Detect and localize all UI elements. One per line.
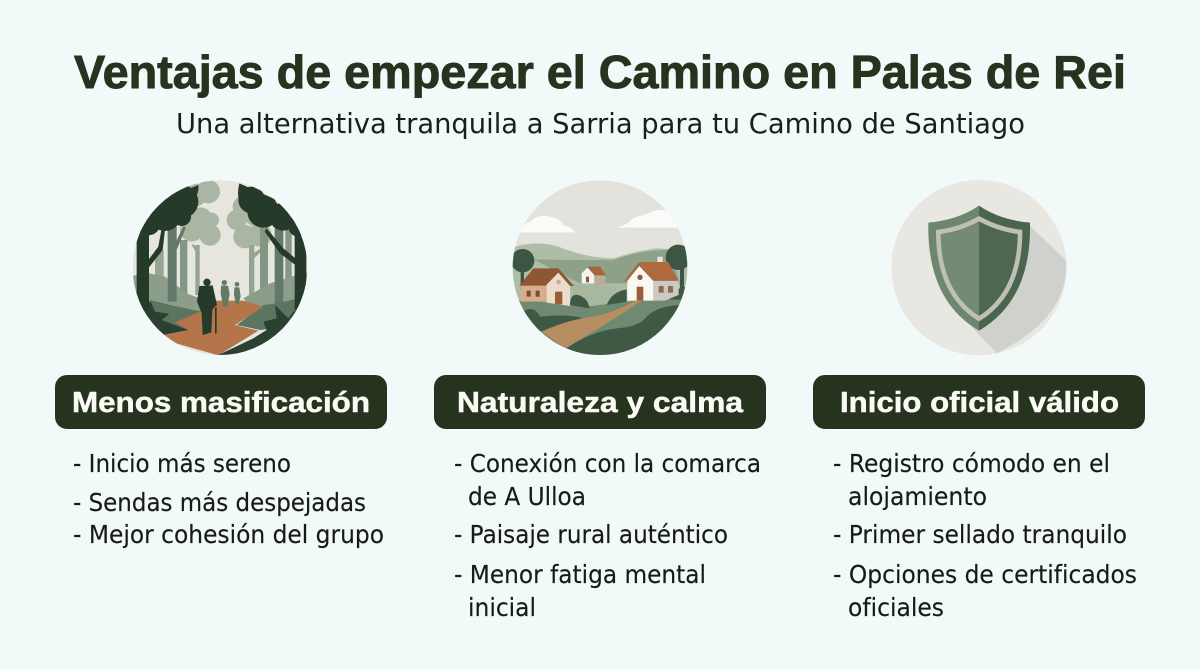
heading badge xyxy=(434,375,766,429)
title: Ventajas de empezar el Camino en Palas de Rei xyxy=(74,46,1126,98)
icon: rural village xyxy=(512,180,688,355)
bullet list: - Conexión con la comarca xyxy=(454,449,761,478)
small hikers xyxy=(221,280,241,307)
bullet list xyxy=(73,449,384,549)
subtitle: Una alternativa tranquila a Sarria para tu Camino de Santiago xyxy=(176,107,1025,140)
bullet list: - Primer sellado tranquilo xyxy=(833,520,1127,549)
bullet list: - Paisaje rural auténtico xyxy=(454,520,728,549)
panel: menos masificación xyxy=(55,170,387,549)
panel: inicio oficial válido xyxy=(813,180,1145,622)
bullet list: inicial xyxy=(468,593,536,622)
panel: naturaleza y calma xyxy=(434,170,766,622)
icon: shield xyxy=(892,180,1066,356)
heading badge: Inicio oficial válido xyxy=(840,387,1119,419)
heading badge xyxy=(813,375,1145,429)
bullet list xyxy=(833,449,1137,622)
bullet list: - Mejor cohesión del grupo xyxy=(73,520,384,549)
heading badge xyxy=(55,375,387,429)
bullet list: - Menor fatiga mental xyxy=(454,560,706,589)
bullet list xyxy=(454,449,761,622)
bullet list: oficiales xyxy=(848,593,944,622)
icon: forest path with hikers xyxy=(132,180,308,355)
main hiker xyxy=(197,279,217,335)
left house xyxy=(521,285,547,302)
bullet list: - Opciones de certificados xyxy=(833,560,1137,589)
bullet list: alojamiento xyxy=(848,482,987,511)
heading badge: Naturaleza y calma xyxy=(457,387,744,419)
bullet list: de A Ulloa xyxy=(468,482,586,511)
bullet list: - Inicio más sereno xyxy=(73,449,291,478)
small house xyxy=(582,268,594,283)
heading badge: Menos masificación xyxy=(72,387,370,419)
bullet list: - Sendas más despejadas xyxy=(73,488,366,517)
bullet list: - Registro cómodo en el xyxy=(833,449,1110,478)
right house xyxy=(657,256,663,262)
